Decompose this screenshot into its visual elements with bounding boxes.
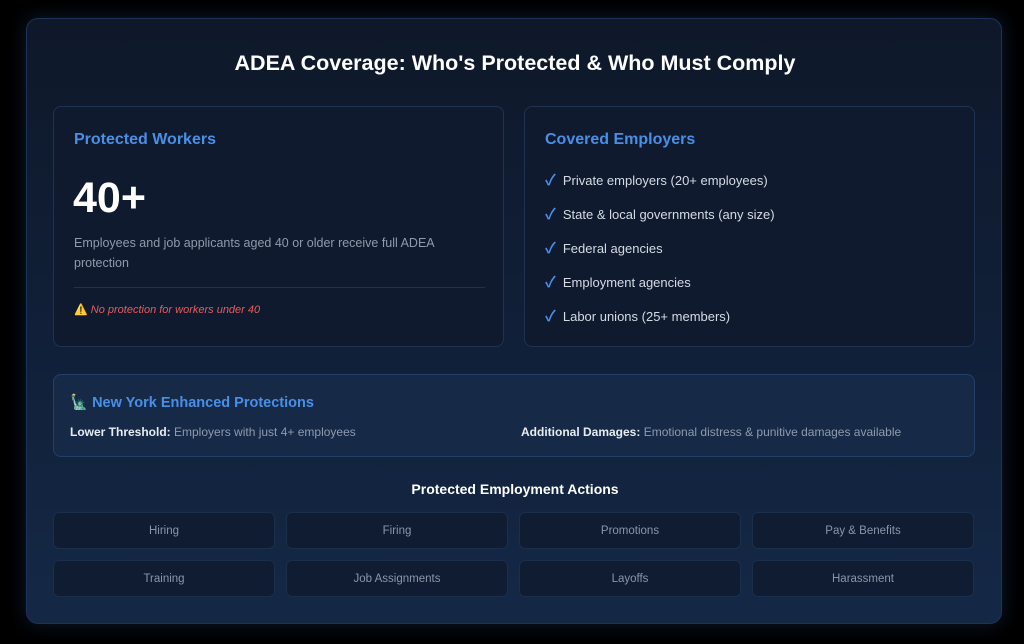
heading: covered employers: Covered Employers bbox=[545, 131, 695, 148]
panel: covered employers bbox=[524, 106, 975, 347]
list of employers: ✓ Employment agencies bbox=[545, 274, 691, 291]
actions grid: Job Assignments bbox=[354, 573, 440, 585]
actions grid: Pay & Benefits bbox=[825, 525, 901, 537]
panel: protected workers bbox=[53, 106, 504, 347]
actions grid: Harassment bbox=[832, 573, 894, 585]
list of employers: ✓ Private employers (20+ employees) bbox=[545, 172, 768, 189]
actions grid: Promotions bbox=[601, 525, 659, 537]
heading: protected workers: Protected Workers bbox=[74, 131, 216, 148]
list of employers: ✓ Federal agencies bbox=[545, 240, 663, 257]
lower threshold: Lower Threshold: Employers with just 4+ employees bbox=[70, 425, 356, 439]
actions grid: Firing bbox=[383, 525, 411, 537]
list of employers: ✓ State & local governments (any size) bbox=[545, 206, 775, 223]
big number 40+: 40+ bbox=[73, 174, 146, 222]
list of employers bbox=[545, 172, 775, 325]
list of employers: ✓ Labor unions (25+ members) bbox=[545, 308, 730, 325]
panel: new york enhanced protections bbox=[53, 374, 975, 457]
additional damages: Additional Damages: Emotional distress & punitive damages available bbox=[521, 425, 901, 439]
description: Employees and job applicants aged 40 or older receive full ADEA protection bbox=[74, 236, 434, 270]
title: ADEA Coverage: Who's Protected & Who Must Comply bbox=[235, 51, 795, 75]
actions grid: Layoffs bbox=[612, 573, 648, 585]
heading: new york: 🗽 New York Enhanced Protections bbox=[70, 395, 314, 411]
actions grid: Training bbox=[143, 573, 185, 585]
actions grid bbox=[53, 512, 974, 596]
warning note: ⚠️ No protection for workers under 40 bbox=[74, 304, 260, 316]
heading: protected employment actions: Protected Employment Actions bbox=[411, 481, 619, 497]
actions grid: Hiring bbox=[149, 525, 179, 537]
